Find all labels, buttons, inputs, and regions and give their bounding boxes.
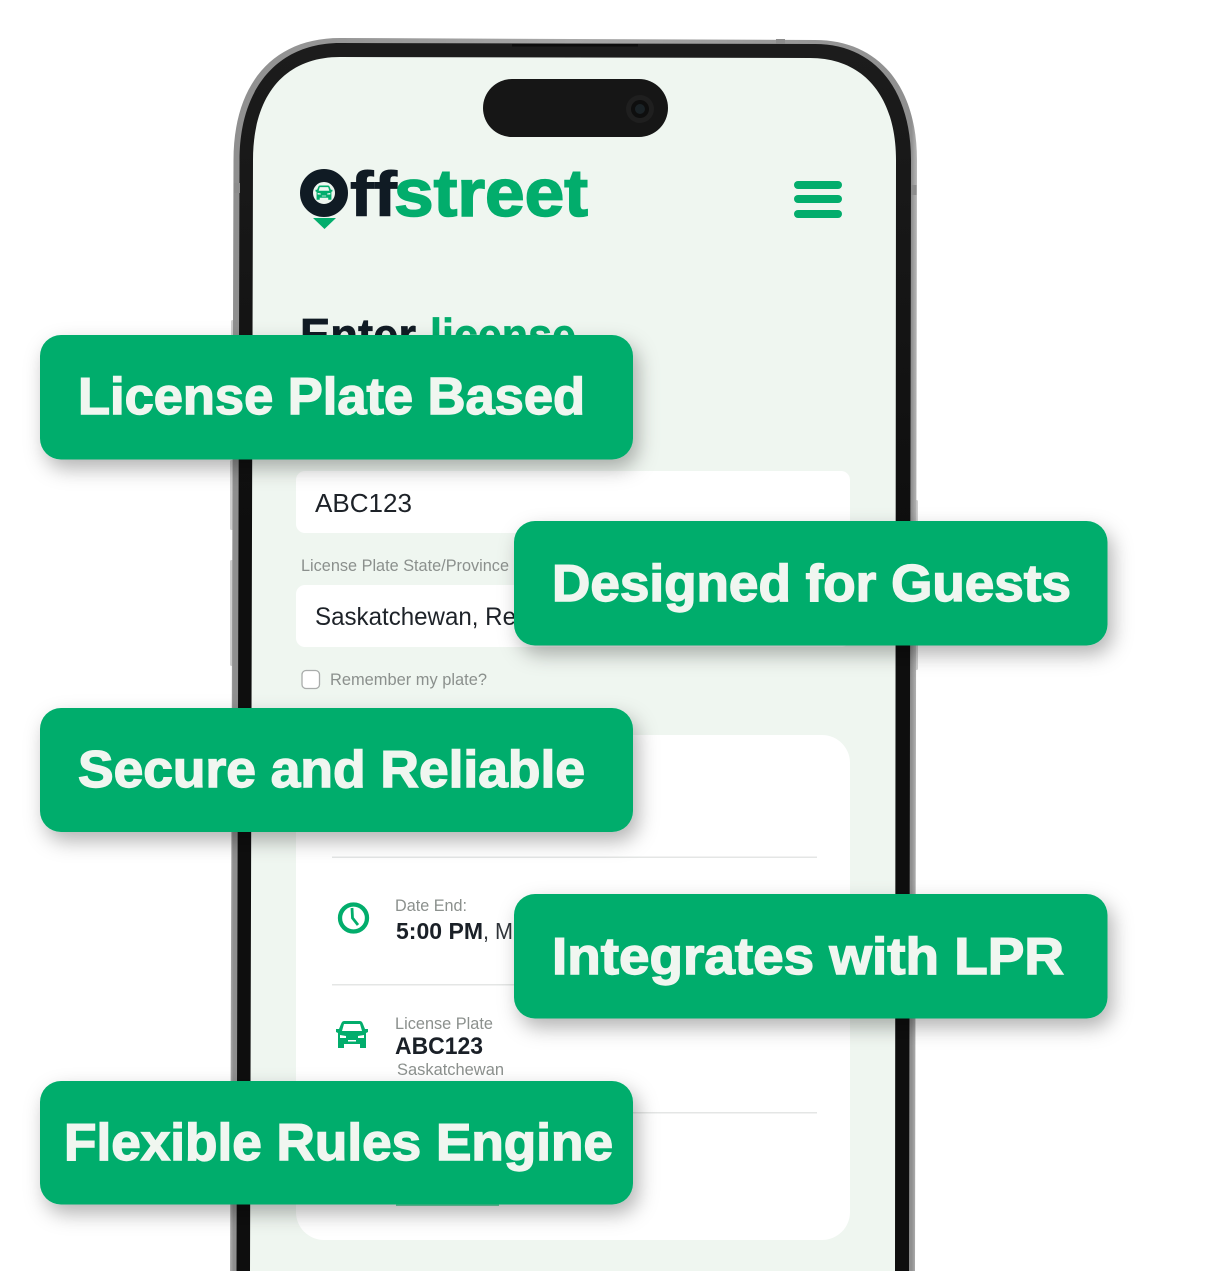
date end xyxy=(395,896,513,944)
state label: License Plate State/Province xyxy=(301,556,509,575)
phone bezel xyxy=(236,43,911,1271)
license plate details: License Plate xyxy=(395,1014,493,1033)
dynamic island xyxy=(483,79,668,137)
feature label: Integrates with LPR: Integrates with LPR xyxy=(552,928,1064,986)
feature label: Flexible Rules Engine: Flexible Rules Engine xyxy=(64,1114,613,1172)
date end: Date End: xyxy=(395,896,467,915)
feature label: Flexible Rules Engine xyxy=(40,1081,633,1204)
logo pin ring xyxy=(306,176,342,210)
logo car icon xyxy=(316,186,332,200)
heading: Enter license: Enter xyxy=(300,309,416,361)
logo: Offstreet xyxy=(306,156,588,231)
license plate details xyxy=(395,1014,504,1079)
button sliver xyxy=(396,1204,499,1206)
feature label: License Plate Based xyxy=(40,335,633,460)
date end: , M xyxy=(483,918,513,944)
antenna bands xyxy=(234,39,916,195)
heading: Enter license: license xyxy=(430,309,576,361)
state input xyxy=(296,585,850,647)
feature label: Designed for Guests: Designed for Guests xyxy=(552,555,1071,613)
feature label: Integrates with LPR xyxy=(514,894,1108,1018)
logo wordmark: street xyxy=(394,156,588,231)
summary card xyxy=(296,735,850,1240)
top speaker xyxy=(512,44,638,46)
car icon xyxy=(336,1021,368,1048)
remember checkbox: Remember my plate? xyxy=(330,670,487,689)
phone frame xyxy=(230,38,917,1271)
logo wordmark: ff xyxy=(350,160,398,230)
license plate details: ABC123 xyxy=(395,1033,483,1060)
plate input: ABC123 xyxy=(315,488,412,518)
date end: 5:00 PM xyxy=(396,918,483,944)
menu icon xyxy=(794,181,842,218)
feature label: Secure and Reliable: Secure and Reliable xyxy=(78,741,585,799)
state input: Saskatchewan, Re xyxy=(315,603,516,631)
phone screen xyxy=(250,57,896,1271)
heading: Enter license xyxy=(300,309,576,361)
feature label: Secure and Reliable xyxy=(40,708,633,832)
clock icon xyxy=(340,904,367,932)
plate input xyxy=(296,471,850,533)
phone mockup xyxy=(230,38,918,1271)
license plate details: Saskatchewan xyxy=(397,1060,504,1079)
logo pin tip xyxy=(313,218,336,229)
side buttons xyxy=(230,320,918,670)
feature label: Designed for Guests xyxy=(514,521,1108,646)
feature label: License Plate Based: License Plate Based xyxy=(78,368,585,426)
